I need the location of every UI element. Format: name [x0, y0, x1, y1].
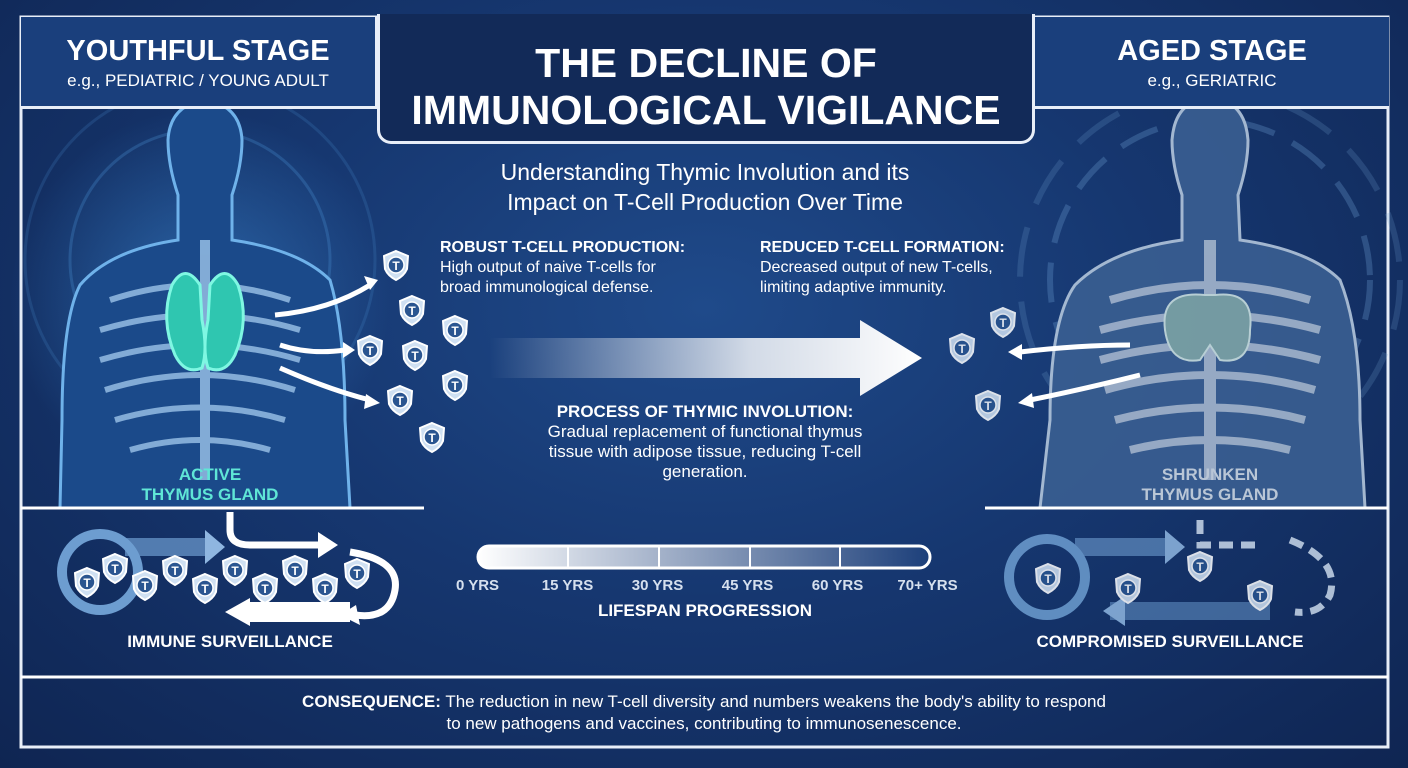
lifespan labels: 15 YRS [542, 577, 593, 594]
big progression arrow [490, 320, 922, 396]
lifespan labels [456, 577, 958, 620]
label: shrunken thymus [1142, 465, 1278, 504]
label: active thymus [142, 465, 278, 504]
figure: aged body [1020, 90, 1400, 508]
label: compromised surveillance: COMPROMISED SURVEILLANCE [1036, 632, 1304, 651]
panel divider lines [21, 506, 424, 510]
right surveillance loop [1009, 520, 1332, 626]
subtitle: Understanding Thymic Involution and its [501, 159, 909, 185]
text: robust production: broad immunological defense. [440, 279, 653, 296]
left surveillance loop [62, 512, 395, 626]
text: process: Gradual replacement of functional thymus [548, 422, 862, 441]
label: immune surveillance: IMMUNE SURVEILLANCE [127, 632, 333, 651]
title: IMMUNOLOGICAL VIGILANCE [411, 87, 1001, 133]
arrows left out [275, 285, 370, 400]
text: robust production: High output of naive T-cells for [440, 259, 656, 276]
consequence: CONSEQUENCE: The reduction in new T-cell diversity and numbers weakens the body's ability to respond [302, 692, 1106, 711]
title: THE DECLINE OF [535, 40, 877, 86]
text: process: tissue with adipose tissue, reducing T-cell [549, 442, 861, 461]
figure: youthful body [10, 85, 390, 508]
subtitle [501, 159, 909, 215]
label: active thymus: ACTIVE [179, 465, 241, 484]
subtitle: Impact on T-Cell Production Over Time [507, 189, 903, 215]
text: robust production: ROBUST T-CELL PRODUCTION: [440, 239, 685, 256]
text: reduced formation: REDUCED T-CELL FORMATION: [760, 239, 1005, 256]
consequence: to new pathogens and vaccines, contributing to immunosenescence. [446, 714, 962, 733]
header: youthful stage: e.g., PEDIATRIC / YOUNG ADULT [67, 71, 329, 90]
lifespan labels: 45 YRS [722, 577, 773, 594]
consequence [302, 692, 1106, 733]
text: process [548, 402, 862, 481]
lifespan bar [478, 546, 930, 568]
label: shrunken thymus: SHRUNKEN [1162, 465, 1258, 484]
header: aged stage: e.g., GERIATRIC [1147, 71, 1277, 90]
title [377, 14, 1035, 144]
lifespan labels: 60 YRS [812, 577, 863, 594]
text: process: generation. [662, 462, 748, 481]
lifespan labels: 70+ YRS [897, 577, 958, 594]
text: reduced formation [760, 239, 1005, 296]
text: reduced formation: limiting adaptive immunity. [760, 279, 946, 296]
lifespan labels: 30 YRS [632, 577, 683, 594]
header: youthful stage [21, 17, 378, 109]
lifespan labels: LIFESPAN PROGRESSION [598, 601, 812, 620]
header: aged stage [1032, 17, 1389, 109]
arrows right in [1020, 345, 1140, 400]
header: youthful stage: YOUTHFUL STAGE [66, 35, 330, 67]
text: robust production [440, 239, 685, 296]
label: active thymus: THYMUS GLAND [142, 485, 278, 504]
left T-cells [358, 251, 467, 452]
header: aged stage: AGED STAGE [1117, 35, 1307, 67]
text: reduced formation: Decreased output of new T-cells, [760, 259, 993, 276]
text: process: PROCESS OF THYMIC INVOLUTION: [557, 402, 853, 421]
label: shrunken thymus: THYMUS GLAND [1142, 485, 1278, 504]
lifespan labels: 0 YRS [456, 577, 499, 594]
